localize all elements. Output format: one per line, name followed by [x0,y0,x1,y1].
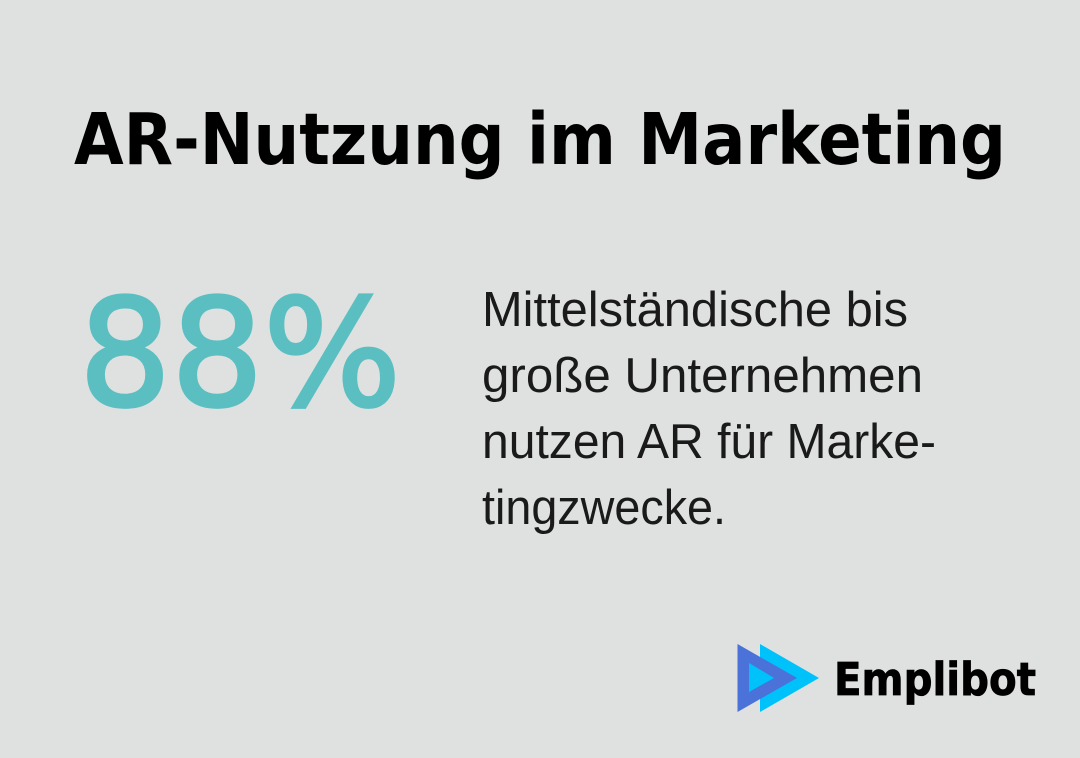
description text: nutzen AR für Marke- [482,415,936,469]
logo: Emplibot [738,644,1036,712]
statistic: 88%: 88% [79,268,401,440]
description text: große Unternehmen [482,349,923,403]
title: AR-Nutzung im Marketing [74,98,1006,181]
icon: play triangles [738,644,819,712]
logo wordmark: Emplibot [834,653,1036,706]
description text [482,283,936,535]
description text: tingzwecke. [482,481,726,535]
description text: Mittelständische bis [482,283,908,337]
